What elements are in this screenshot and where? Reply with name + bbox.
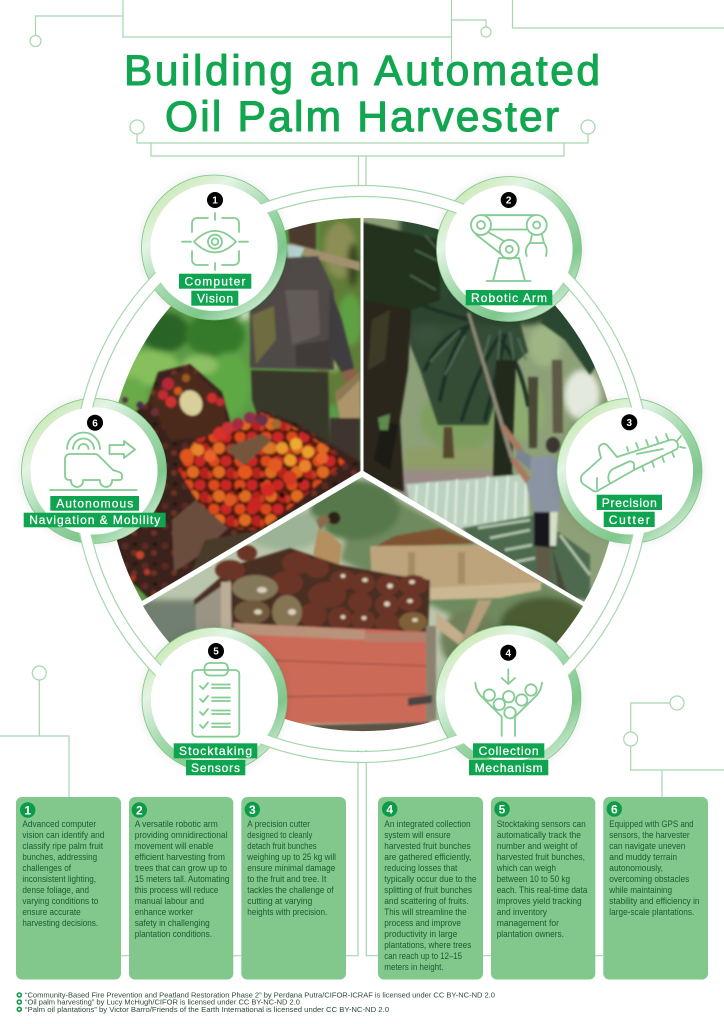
card 4: meters in height. — [384, 962, 444, 972]
label: Computer Vision — [179, 274, 251, 306]
card 4: can reach up to 12–15 — [384, 951, 462, 961]
card 6: large-scale plantations. — [609, 907, 694, 917]
card 1: challenges of — [22, 863, 72, 873]
inner discs — [30, 184, 693, 764]
card 5: 5 — [499, 802, 506, 816]
card 5: automatically track the — [497, 830, 581, 840]
card 4: reducing losses that — [384, 863, 458, 873]
card 3: ensure minimal damage — [247, 863, 335, 873]
card 2: providing omnidirectional — [135, 830, 227, 840]
card 6 — [603, 797, 708, 980]
ring shadows — [22, 176, 702, 772]
label: Robotic Arm: Robotic Arm — [471, 291, 547, 305]
node 6: autonomous navigation — [24, 415, 166, 527]
label: Computer Vision: Vision — [197, 292, 233, 306]
title — [124, 48, 600, 141]
card 3: designed to cleanly — [247, 830, 313, 840]
card 5: and inventory — [497, 907, 547, 917]
card 3: A precision cutter — [247, 819, 310, 829]
card 4: splitting of fruit bunches — [384, 885, 472, 895]
card 1: classify ripe palm fruit — [22, 841, 104, 851]
icon: chainsaw — [581, 434, 685, 491]
card 4: system will ensure — [384, 830, 451, 840]
card 1: bunches, addressing — [22, 852, 97, 862]
card 4: plantations, where trees — [384, 940, 472, 950]
card 3: detach fruit bunches — [247, 841, 317, 851]
card 2: efficient harvesting from — [135, 852, 225, 862]
node 3: precision cutter — [581, 414, 685, 527]
photo: fruit harvest with worker — [117, 218, 360, 601]
card 2 — [129, 797, 233, 980]
card 3: cutting at varying — [247, 896, 312, 906]
label: Autonomous Navigation & Mobility — [24, 496, 166, 527]
label: Stocktaking Sensors: Stocktaking — [179, 744, 252, 758]
rings — [26, 180, 698, 768]
card 4 — [378, 797, 483, 980]
photo divider lines — [142, 218, 584, 604]
card 6: and muddy terrain — [609, 852, 677, 862]
number badge 4: 4 — [506, 648, 512, 659]
card 1: Advanced computer — [22, 819, 96, 829]
label: Collection Mechanism — [469, 743, 548, 775]
card 6: overcoming obstacles — [609, 874, 690, 884]
outer double arc band — [74, 186, 650, 762]
card 5: management for — [497, 918, 559, 928]
card 1: dense foliage, and — [22, 885, 89, 895]
connector lines: top — [30, 0, 724, 190]
card 4: productivity in large — [384, 929, 457, 939]
icon: funnel with fruit — [475, 669, 542, 736]
card 5: harvested fruit bunches, — [497, 852, 585, 862]
card 4: typically occur due to the — [384, 874, 477, 884]
label: Stocktaking Sensors: Sensors — [191, 761, 240, 775]
photo credits: “Palm oil plantations” by Victor Barro/Friends of the Earth International is licensed under CC BY-NC-ND 2.0 — [25, 1005, 389, 1014]
card 6: can navigate uneven — [609, 841, 685, 851]
label: Precision Cutter — [597, 495, 662, 527]
card 2: 2 — [136, 803, 143, 817]
card 1: inconsistent lighting, — [22, 874, 96, 884]
card 6: while maintaining — [608, 885, 672, 895]
card 4: harvested fruit bunches — [384, 841, 471, 851]
number badge 2: 2 — [506, 196, 512, 207]
card 6: stability and efficiency in — [609, 896, 700, 906]
node 4: collection mechanism — [469, 645, 548, 775]
card 2: this process will reduce — [135, 885, 218, 895]
card 1: harvesting decisions. — [22, 918, 98, 928]
label: Computer Vision: Computer — [184, 274, 246, 288]
icon: clipboard checklist — [192, 663, 239, 737]
photo credits — [17, 990, 495, 1014]
card 2: manual labour and — [135, 896, 204, 906]
icon: autonomous vehicle — [50, 432, 137, 490]
card 1: ensure accurate — [22, 907, 81, 917]
card 3: heights with precision. — [247, 907, 327, 917]
label: Precision Cutter: Cutter — [609, 513, 650, 527]
card 5: each. This real-time data — [497, 885, 587, 895]
card 2: enhance worker — [135, 907, 193, 917]
card 3: to the fruit and tree. It — [247, 874, 327, 884]
title: Oil Palm Harvester — [165, 94, 559, 141]
node 5: stocktaking sensors — [174, 643, 257, 775]
photo credits: “Oil palm harvesting” by Lucy McHugh/CIFOR is licensed under CC BY-NC-ND 2.0 — [25, 998, 300, 1006]
card 2: plantation conditions. — [135, 929, 212, 939]
card 3: weighing up to 25 kg will — [246, 852, 336, 862]
card 5: number and weight of — [497, 841, 578, 851]
icon: robot arm — [471, 215, 547, 281]
card 5: Stocktaking sensors can — [497, 819, 586, 829]
card 1: 1 — [24, 803, 31, 817]
card 5: which can weigh — [496, 863, 556, 873]
label: Stocktaking Sensors — [174, 743, 257, 775]
card 4: and scattering of fruits. — [384, 896, 469, 906]
card 3: 3 — [249, 803, 256, 817]
label: Precision Cutter: Precision — [602, 496, 657, 510]
number badge 1: 1 — [212, 196, 218, 207]
card 6: Equipped with GPS and — [609, 819, 694, 829]
card 2: A versatile robotic arm — [135, 819, 218, 829]
card 5: between 10 to 50 kg — [497, 874, 570, 884]
card 4: process and improve — [384, 918, 461, 928]
card 5: plantation owners. — [497, 929, 564, 939]
node 2: robotic arm — [466, 192, 552, 305]
icon: eye in target — [182, 213, 248, 270]
title: Building an Automated — [124, 48, 600, 95]
label: Autonomous Navigation & Mobility: Navigation & Mobility — [29, 513, 160, 527]
card 5: improves yield tracking — [497, 896, 582, 906]
card 6: autonomously, — [609, 863, 663, 873]
label: Collection Mechanism: Mechanism — [475, 761, 543, 775]
number badge 6: 6 — [92, 418, 98, 429]
card 2: movement will enable — [135, 841, 213, 851]
card 1 — [16, 797, 121, 980]
card 6: 6 — [611, 802, 618, 816]
card 2: 15 meters tall. Automating — [135, 874, 229, 884]
photo credits: “Community-Based Fire Prevention and Peatland Restoration Phase 2” by Perdana Putra/CIFOR-ICRAF is licensed under CC BY-NC-ND 2.0 — [25, 990, 495, 1000]
label: Autonomous Navigation & Mobility: Autonomous — [56, 497, 133, 511]
node 1: computer vision — [179, 192, 251, 306]
card 4: 4 — [386, 802, 393, 816]
card 4: are gathered efficiently, — [384, 852, 471, 862]
number badge 3: 3 — [627, 418, 633, 429]
card 3 — [241, 797, 346, 980]
label: Collection Mechanism: Collection — [479, 744, 539, 758]
card 1: varying conditions to — [22, 896, 98, 906]
card 2: trees that can grow up to — [135, 863, 227, 873]
card 3: tackles the challenge of — [247, 885, 334, 895]
photo: truck loaded with palm fruit — [143, 477, 583, 732]
card 6: sensors, the harvester — [609, 830, 690, 840]
connector lines: lower — [0, 666, 724, 956]
card 4: This will streamline the — [384, 907, 467, 917]
card 5 — [491, 797, 595, 980]
number badge 6 — [87, 415, 103, 431]
photo: worker with harvesting pole in plantation — [360, 215, 620, 615]
number badge 5: 5 — [213, 647, 219, 658]
card 2: safety in challenging — [135, 918, 210, 928]
card 4: An integrated collection — [384, 819, 471, 829]
card 1: vision can identify and — [22, 830, 104, 840]
